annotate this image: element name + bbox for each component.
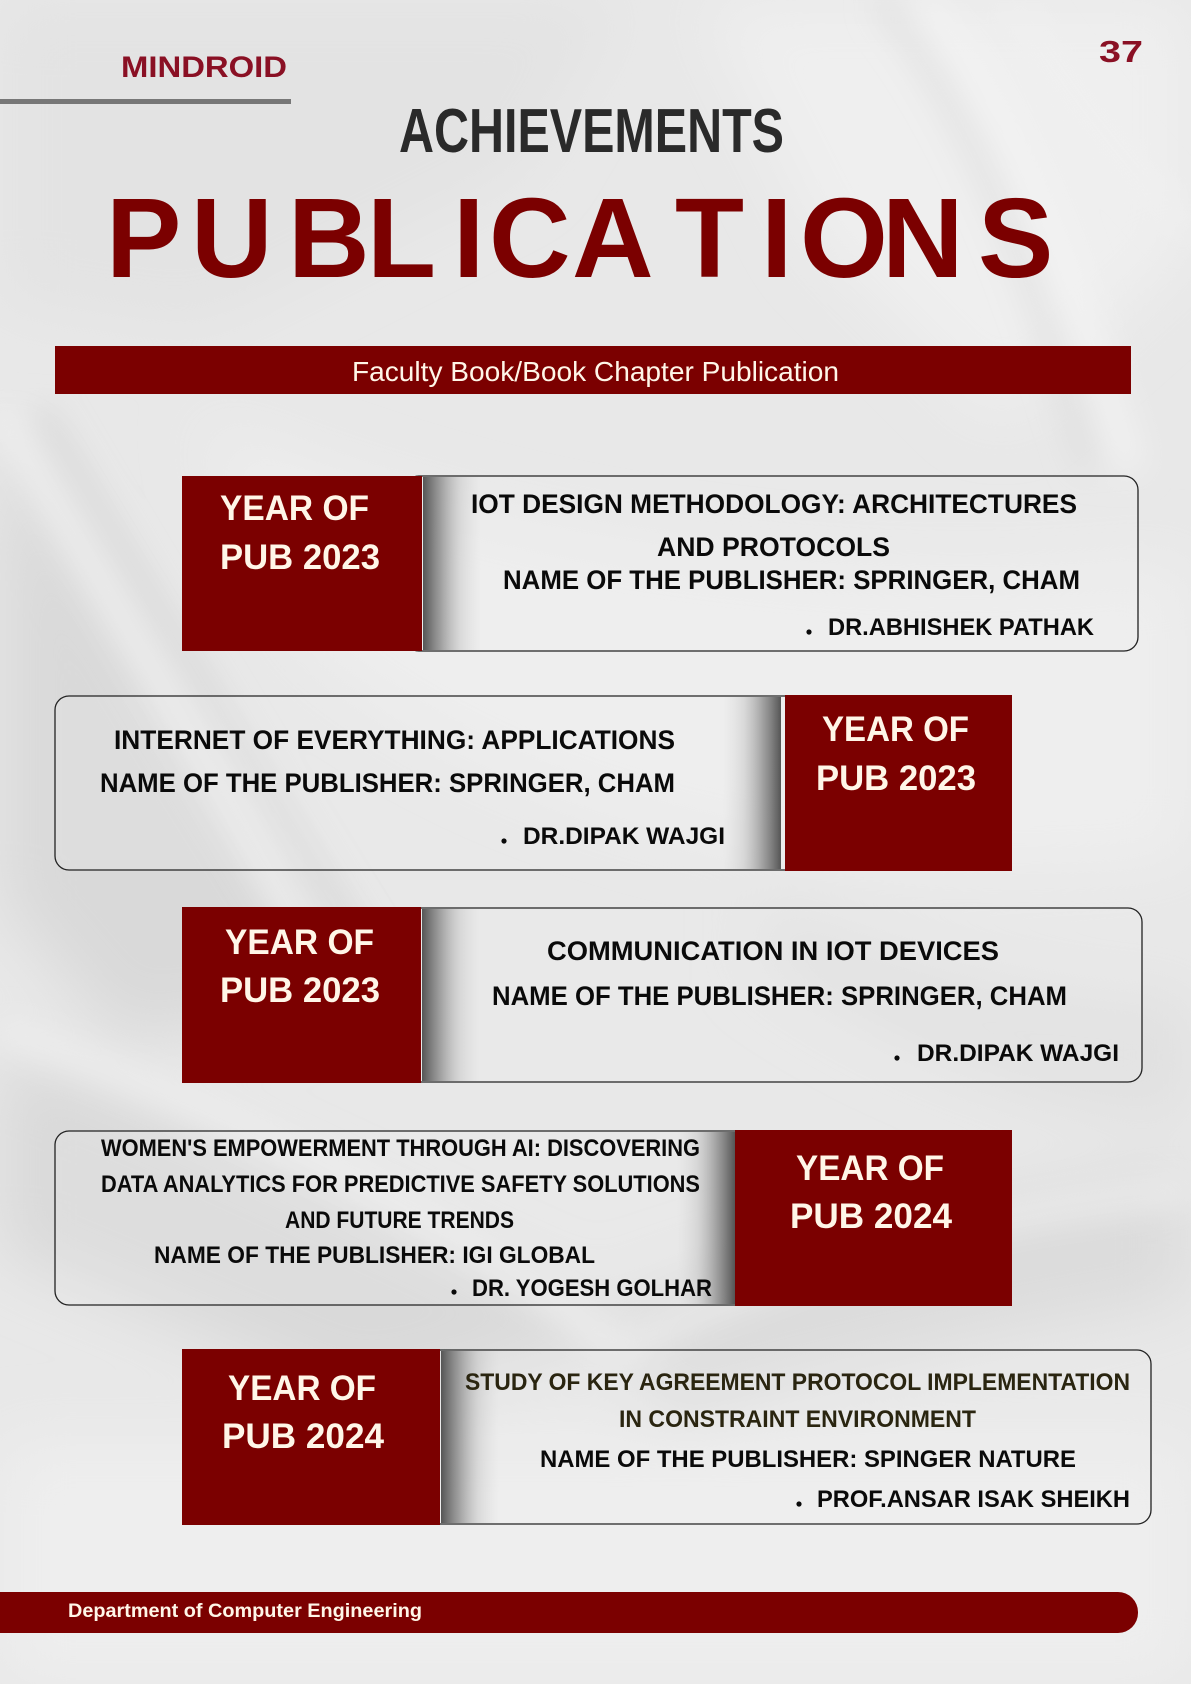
year badge 3 (182, 907, 421, 1083)
publication 2 details (100, 725, 725, 850)
publication 1 details: AND PROTOCOLS (657, 532, 890, 562)
publication 1 details: DR.ABHISHEK PATHAK (828, 614, 1095, 641)
year badge 1: PUB 2023 (220, 538, 380, 577)
section banner (55, 346, 1131, 394)
footer bar (0, 1592, 1138, 1633)
title: achievements: ACHIEVEMENTS (399, 97, 784, 166)
year badge 2 (785, 695, 1012, 871)
publication card 5 (182, 1349, 1151, 1525)
header rule (0, 99, 291, 104)
publication 1 details: NAME OF THE PUBLISHER: SPRINGER, CHAM (503, 565, 1080, 595)
year badge 5: PUB 2024 (222, 1417, 385, 1456)
publication 4 details: NAME OF THE PUBLISHER: IGI GLOBAL (154, 1242, 595, 1269)
year badge 2: PUB 2023 (816, 759, 976, 798)
publication 4 details: DATA ANALYTICS FOR PREDICTIVE SAFETY SOLUTIONS (101, 1171, 700, 1198)
year badge 2: YEAR OF (822, 710, 969, 749)
publication 5 details: NAME OF THE PUBLISHER: SPINGER NATURE (540, 1446, 1076, 1473)
year badge 3: YEAR OF (225, 923, 374, 962)
publication 4 details: WOMEN'S EMPOWERMENT THROUGH AI: DISCOVERING (101, 1135, 700, 1162)
publication 3 details: COMMUNICATION IN IOT DEVICES (547, 936, 999, 966)
year badge 4: PUB 2024 (790, 1197, 953, 1236)
title: publications: PUBLICATIONS (106, 175, 1053, 301)
header: magazine name: MINDROID (121, 51, 287, 84)
publication card 2 (55, 695, 1012, 871)
publication card 3 (182, 907, 1142, 1083)
publication 4 details (101, 1135, 712, 1302)
publication 2 details: INTERNET OF EVERYTHING: APPLICATIONS (114, 725, 675, 755)
publication card 4 (55, 1130, 1012, 1306)
footer bar: Department of Computer Engineering (68, 1601, 422, 1622)
publication 5 details: IN CONSTRAINT ENVIRONMENT (619, 1406, 976, 1433)
publication 5 details: STUDY OF KEY AGREEMENT PROTOCOL IMPLEMENTATION (465, 1369, 1130, 1396)
year badge 1 (182, 476, 422, 651)
page number: 37 (1099, 34, 1143, 69)
publication 2 details: DR.DIPAK WAJGI (523, 823, 725, 850)
publication 3 details (492, 936, 1119, 1067)
publication 5 details: PROF.ANSAR ISAK SHEIKH (817, 1486, 1130, 1513)
publication 4 details: AND FUTURE TRENDS (285, 1207, 514, 1234)
publication 4 details: DR. YOGESH GOLHAR (472, 1275, 712, 1302)
publication 1 details: IOT DESIGN METHODOLOGY: ARCHITECTURES (471, 489, 1077, 519)
year badge 4 (735, 1130, 1012, 1306)
publication card 1 (182, 476, 1138, 651)
publication 5 details (465, 1369, 1130, 1513)
publication 3 details: NAME OF THE PUBLISHER: SPRINGER, CHAM (492, 981, 1067, 1011)
publication 2 details: NAME OF THE PUBLISHER: SPRINGER, CHAM (100, 768, 675, 798)
year badge 5: YEAR OF (228, 1369, 376, 1408)
publication 3 details: DR.DIPAK WAJGI (917, 1040, 1119, 1067)
section banner: Faculty Book/Book Chapter Publication (352, 356, 839, 387)
year badge 4: YEAR OF (796, 1149, 944, 1188)
publication 1 details (471, 489, 1095, 641)
year badge 3: PUB 2023 (220, 971, 380, 1010)
year badge 5 (182, 1349, 440, 1525)
year badge 1: YEAR OF (220, 489, 369, 528)
